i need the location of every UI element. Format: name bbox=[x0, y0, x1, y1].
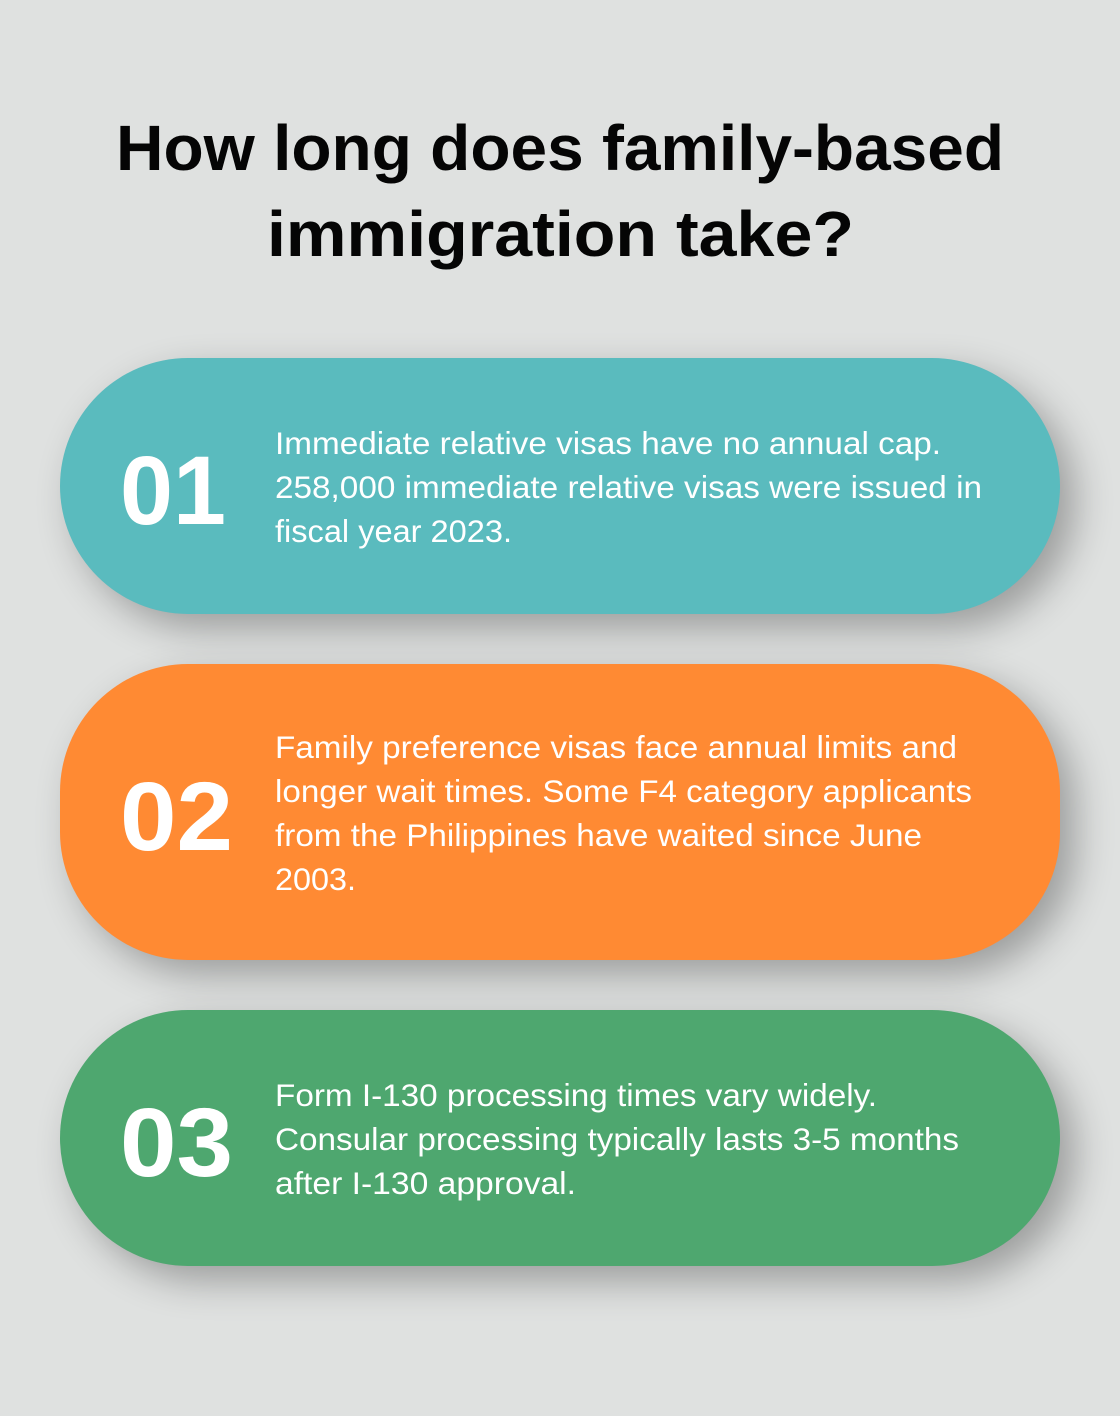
title: immigration take? bbox=[267, 198, 854, 270]
number 03: 03 bbox=[120, 1088, 233, 1197]
text block: step 03 description: after I-130 approval. bbox=[275, 1165, 576, 1201]
text block: step 03 description bbox=[275, 1077, 959, 1201]
text block: step 02 description: from the Philippines have waited since June bbox=[275, 817, 922, 853]
text block: step 01 description: fiscal year 2023. bbox=[275, 513, 512, 549]
number 01: 01 bbox=[120, 436, 226, 545]
text block: step 02 description: longer wait times. Some F4 category applicants bbox=[275, 773, 972, 809]
text block: step 01 description: 258,000 immediate relative visas were issued in bbox=[275, 469, 982, 505]
text block: step 02 description: 2003. bbox=[275, 861, 356, 897]
text block: step 03 description: Consular processing typically lasts 3-5 months bbox=[275, 1121, 959, 1157]
panel: step 02 family preference visas bbox=[60, 664, 1060, 960]
text block: step 02 description bbox=[275, 729, 972, 897]
title bbox=[116, 112, 1004, 270]
text block: step 03 description: Form I-130 processing times vary widely. bbox=[275, 1077, 877, 1113]
panel: step 01 immediate relative visas bbox=[60, 358, 1060, 614]
title: How long does family-based bbox=[116, 112, 1004, 184]
text block: step 02 description: Family preference visas face annual limits and bbox=[275, 729, 957, 765]
text block: step 01 description bbox=[275, 425, 982, 549]
number 02: 02 bbox=[120, 762, 233, 871]
panel: step 03 form I-130 processing bbox=[60, 1010, 1060, 1266]
text block: step 01 description: Immediate relative visas have no annual cap. bbox=[275, 425, 941, 461]
